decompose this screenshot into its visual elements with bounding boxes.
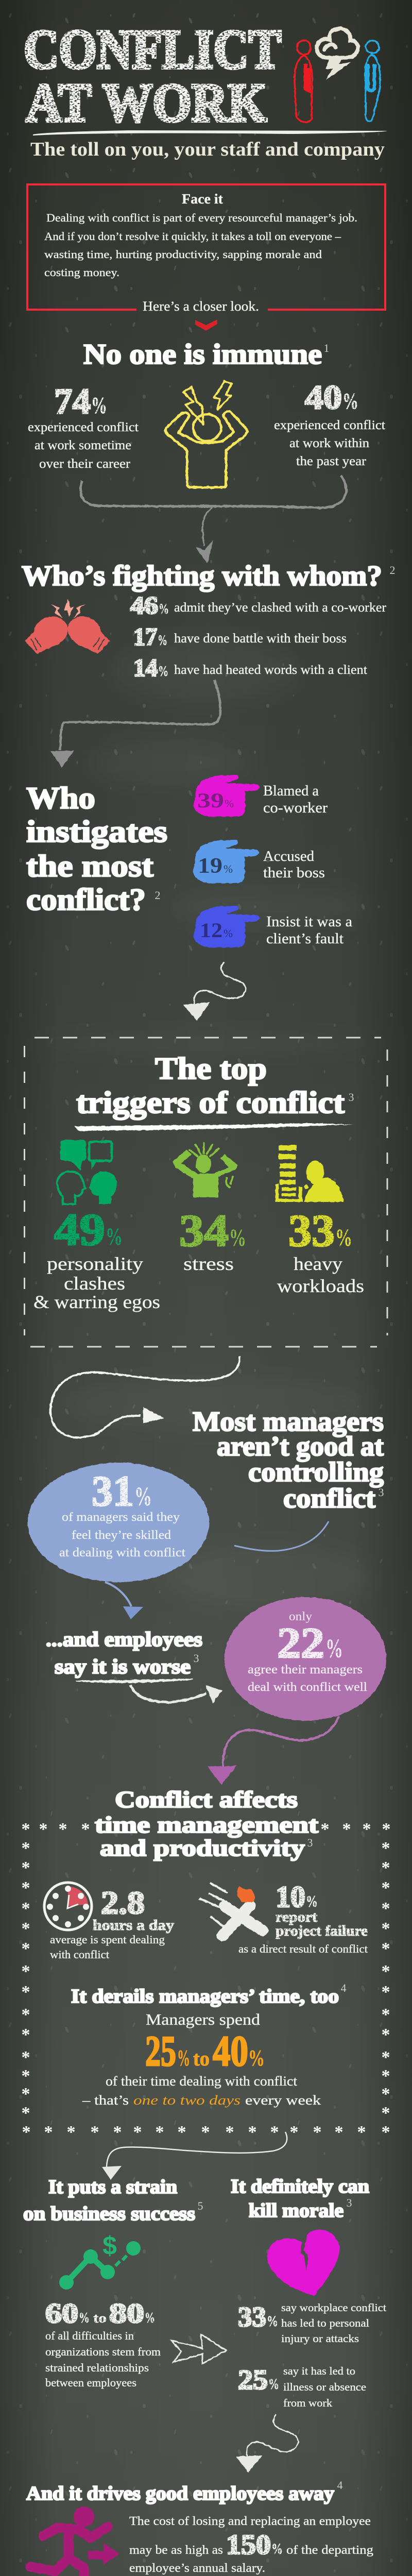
stat: 60 to 80 percent: 80 — [109, 2298, 144, 2329]
text: cost of replacing an employee: % — [271, 2540, 283, 2557]
section: no one is immune — [28, 338, 385, 564]
stat: 33 percent injury: injury or attacks — [281, 2332, 359, 2345]
stat: 25 percent illness: 25 — [238, 2364, 268, 2395]
stat: 2.8 hours a day: hours a day — [93, 1917, 175, 1934]
label: accused their boss: Accused — [263, 848, 314, 865]
heading: and employees say it is worse: say it is worse — [55, 1655, 191, 1678]
icon: magenta pointing hand 39 percent — [194, 775, 260, 817]
heading: aren’t good at — [217, 1431, 384, 1462]
stat: 33 percent injury — [238, 2301, 386, 2345]
stat: 40 percent: % — [342, 388, 358, 414]
stat: 14 percent — [133, 654, 367, 682]
panel: purple ellipse 22 percent: 22 — [277, 1619, 324, 1667]
stat: 33 percent heavy workloads: workloads — [277, 1276, 364, 1296]
stat: 33 percent injury: has led to personal — [281, 2317, 369, 2329]
label: insist it was a client's fault: client’s fault — [266, 930, 344, 947]
stat: 25 percent illness: % — [268, 2376, 279, 2393]
title block — [24, 19, 387, 160]
label: blamed a co-worker — [263, 783, 328, 816]
stat: 60 to 80 percent: % — [79, 2310, 90, 2326]
label: accused their boss: their boss — [263, 865, 325, 881]
icon: red figure — [295, 40, 312, 122]
icon: red chevron — [195, 319, 217, 331]
stat: 25 percent illness — [238, 2364, 366, 2409]
text: time dealing with conflict — [82, 2074, 321, 2108]
stat: 10 percent project failure — [238, 1880, 368, 1955]
stat: 17 percent: % — [158, 633, 167, 649]
heading: Who’s fighting with whom? — [22, 560, 382, 592]
stat: 74 percent: 74 — [54, 382, 91, 421]
icon: storm cloud — [317, 29, 358, 80]
heading — [193, 1406, 384, 1514]
heading — [95, 1786, 319, 1861]
heading — [231, 2176, 369, 2222]
stat: 34 percent stress: 34 — [179, 1206, 229, 1256]
stat: 49 percent personality clashes: % — [106, 1223, 123, 1250]
stat: 46 percent: 46 — [130, 592, 158, 619]
stat: 74 percent: experienced conflict — [28, 420, 139, 434]
stat: 40 percent: the past year — [296, 454, 367, 468]
stat: 17 percent — [133, 623, 347, 651]
stat: 49 percent personality clashes — [33, 1205, 160, 1312]
icon: indigo pointing hand 12 percent: % — [224, 927, 233, 940]
stat: 10 percent project failure: 10 — [276, 1880, 305, 1913]
panel: blue ellipse 31 percent: % — [134, 1482, 152, 1512]
arrow: grey bracket to next section — [81, 476, 346, 564]
stat: 25 percent illness: say it has led to — [283, 2365, 355, 2377]
arrow: white squiggle — [183, 962, 246, 1021]
label: insist it was a client's fault — [266, 913, 352, 947]
heading: 3 — [348, 1091, 354, 1104]
arrow: white to purple ellipse — [76, 1679, 222, 1703]
heading: and productivity — [100, 1835, 305, 1861]
heading: 2 — [154, 889, 161, 902]
text: cost of replacing an employee: 150 — [226, 2529, 271, 2560]
text: time dealing with conflict: – that’s — [82, 2093, 129, 2108]
label: insist it was a client's fault: Insist it was a — [266, 913, 352, 930]
stat: 33 percent heavy workloads — [277, 1206, 364, 1296]
icon: falling chart — [59, 2231, 141, 2290]
panel: blue ellipse 31 percent: 31 — [92, 1467, 134, 1515]
stat: 46 percent: admit they’ve clashed with a co-worker — [174, 601, 387, 615]
stat: 49 percent personality clashes: clashes — [64, 1273, 125, 1294]
stat: 25 to 40 percent: 40 — [213, 2027, 248, 2075]
underline stroke — [33, 130, 387, 135]
title: conflict at work: AT WORK — [26, 73, 267, 133]
icon: running figure — [30, 2506, 119, 2576]
stat: 34 percent stress — [179, 1206, 246, 1274]
text: managers spend: Managers spend — [146, 2010, 261, 2028]
subtitle: The toll on you, your staff and company — [30, 139, 385, 160]
intro paragraph: costing money. — [44, 266, 119, 279]
stat: 25 to 40 percent — [145, 2027, 265, 2075]
heading — [26, 781, 167, 917]
section: who's fighting with whom — [22, 560, 396, 767]
footnote 1: 1 — [323, 342, 330, 354]
section: kill morale — [231, 2176, 386, 2472]
stat: 60 to 80 percent: organizations stem from — [45, 2345, 161, 2358]
icon: blue pointing hand 19 percent: 19 — [198, 854, 222, 878]
title: conflict at work: CONFLICT — [24, 19, 281, 80]
stat: 25 to 40 percent: % — [248, 2045, 265, 2071]
stat: 25 to 40 percent: % — [177, 2045, 190, 2071]
section: who instigates — [26, 775, 352, 1021]
heading: 3 — [346, 2196, 352, 2209]
heading: Conflict affects — [115, 1786, 298, 1812]
subheading: derails managers time: It derails managers’ time, too — [71, 1986, 339, 2007]
heading: time management — [95, 1811, 319, 1838]
stat: 40 percent: 40 — [305, 379, 342, 416]
footnote 2: 2 — [389, 564, 396, 577]
stat: 34 percent stress: % — [229, 1224, 246, 1251]
stat: 49 percent personality clashes: personality — [47, 1253, 143, 1274]
dashed border — [25, 1038, 387, 1347]
arrow: white squiggle — [236, 2414, 298, 2472]
stat: 2.8 hours a day: with conflict — [50, 1948, 109, 1961]
label: blamed a co-worker: Blamed a — [263, 783, 319, 799]
stat: 2.8 hours a day — [50, 1886, 175, 1961]
stat: 14 percent: 14 — [133, 654, 158, 682]
heading: 5 — [198, 2199, 203, 2212]
section: most managers — [28, 1406, 386, 1785]
stat: 40 percent — [274, 379, 385, 468]
icon: indigo pointing hand 12 percent — [194, 906, 260, 947]
section: drives good employees away — [26, 2479, 373, 2576]
label: accused their boss — [263, 848, 325, 881]
heading — [76, 1052, 354, 1120]
stat: 60 to 80 percent: % — [145, 2310, 155, 2326]
icon: blue pointing hand 19 percent — [193, 840, 259, 883]
text: cost of replacing an employee — [129, 2515, 373, 2575]
heading: And it drives good employees away — [26, 2483, 334, 2504]
heading: It puts a strain — [48, 2176, 177, 2198]
panel: purple ellipse 22 percent: deal with conflict well — [248, 1681, 367, 1694]
heading: 4 — [337, 2479, 343, 2492]
text: cost of replacing an employee: may be as high as — [129, 2544, 223, 2557]
stat: 60 to 80 percent: of all difficulties in — [45, 2329, 134, 2342]
icon: stressed person — [173, 1143, 238, 1197]
panel: purple ellipse 22 percent — [225, 1597, 386, 1721]
asterisk border: ******** — [22, 1820, 390, 1839]
stat: 25 percent illness: illness or absence — [283, 2381, 366, 2393]
icon: broken heart — [267, 2230, 339, 2296]
arrow: blue curve into ellipse — [234, 1521, 329, 1551]
intro paragraph: And if you don’t resolve it quickly, it takes a toll on everyone – — [44, 230, 341, 243]
text: time dealing with conflict: one to two days — [133, 2093, 241, 2108]
stat: 10 percent project failure: % — [306, 1892, 318, 1910]
stat: 17 percent: have done battle with their boss — [174, 632, 347, 646]
stat: 10 percent project failure: report — [276, 1909, 317, 1925]
stat: 17 percent: 17 — [133, 623, 157, 651]
heading: and employees say it is worse: ...and employees — [46, 1628, 202, 1651]
heading: the most — [26, 849, 153, 883]
icon: magenta pointing hand 39 percent: 39 — [197, 789, 224, 812]
stat: 60 to 80 percent: 60 — [45, 2298, 78, 2329]
heading: conflict? — [26, 883, 146, 917]
stat: 74 percent: at work sometime — [35, 438, 131, 452]
icon: blue pointing hand 19 percent: % — [224, 862, 233, 875]
stat: 14 percent: % — [158, 664, 168, 680]
stat: 2.8 hours a day: 2.8 — [101, 1886, 145, 1921]
heading underline — [75, 1123, 353, 1131]
icon: indigo pointing hand 12 percent: 12 — [200, 919, 222, 942]
stat: 46 percent: % — [159, 601, 169, 617]
arrow: grey elbow — [50, 680, 220, 767]
icon: crashing plane — [199, 1883, 263, 1936]
text: cost of replacing an employee: of the departing — [286, 2544, 373, 2557]
stat: 74 percent: over their career — [39, 457, 131, 471]
stat: 25 percent illness: from work — [283, 2397, 332, 2409]
arrow: white loop to managers heading — [50, 1356, 239, 1437]
stat: 46 percent — [130, 592, 387, 619]
intro paragraph: wasting time, hurting productivity, sapping morale and — [44, 248, 322, 261]
stat: 10 percent project failure: as a direct result of conflict — [238, 1942, 368, 1955]
stat: 74 percent: % — [91, 392, 107, 418]
heading: face it: Face it — [182, 191, 223, 207]
asterisk border: ************** — [381, 1839, 390, 2123]
stat: 33 percent heavy workloads: heavy — [294, 1253, 342, 1274]
stat: 33 percent injury: % — [267, 2313, 278, 2330]
arrow: white swoop to strain section — [102, 2132, 287, 2180]
heading: on business success — [23, 2203, 195, 2225]
heading: instigates — [26, 815, 167, 849]
stat: 2.8 hours a day: average is spent dealing — [50, 1933, 165, 1946]
heading: triggers of conflict — [76, 1086, 345, 1120]
panel: face it intro — [27, 184, 385, 314]
icon: falling chart: $ — [102, 2231, 117, 2260]
stat: 33 percent injury: 33 — [238, 2301, 266, 2332]
stat: 60 to 80 percent: strained relationships — [45, 2361, 149, 2374]
stat: 60 to 80 percent: between employees — [45, 2376, 136, 2389]
icon: talking heads — [57, 1140, 117, 1204]
stats and labels — [33, 1205, 364, 1312]
stat: 33 percent injury: say workplace conflict — [281, 2301, 386, 2314]
heading: 3 — [307, 1836, 313, 1849]
text: cost of replacing an employee: The cost of losing and replacing an employee — [129, 2515, 371, 2528]
stat: 60 to 80 percent: to — [93, 2311, 107, 2326]
heading: controlling — [248, 1456, 384, 1487]
arrow: white outlined right — [171, 2334, 226, 2364]
text: time dealing with conflict: every week — [245, 2093, 321, 2108]
arrow: purple down — [208, 1716, 339, 1785]
asterisk border — [22, 1820, 390, 2142]
closer look line: Here’s a closer look. — [143, 299, 259, 314]
text: time dealing with conflict: of their time dealing with conflict — [106, 2074, 298, 2089]
panel: time management and productivity — [22, 1786, 390, 2142]
asterisk border: ************** — [22, 1839, 30, 2123]
stat: 49 percent personality clashes: & warring egos — [33, 1292, 160, 1312]
icon: magenta pointing hand 39 percent: % — [225, 797, 234, 810]
panel: top triggers of conflict — [25, 1038, 387, 1347]
stat: 34 percent stress: stress — [183, 1253, 234, 1274]
stat: 25 to 40 percent: to — [193, 2047, 210, 2070]
stat: 60 to 80 percent — [45, 2298, 161, 2389]
label: blamed a co-worker: co-worker — [263, 800, 328, 816]
stat: 40 percent: experienced conflict — [274, 418, 385, 432]
intro paragraph — [44, 211, 357, 279]
panel: blue ellipse 31 percent — [28, 1463, 209, 1582]
stat: 14 percent: have had heated words with a client — [174, 663, 367, 677]
heading: No one is immune — [83, 338, 322, 370]
arrow: blue down — [105, 1582, 143, 1619]
panel: purple ellipse 22 percent: % — [325, 1634, 343, 1664]
heading: kill morale — [249, 2200, 344, 2222]
heading — [23, 2176, 203, 2225]
heading: The top — [155, 1052, 267, 1086]
icon: heavy workload — [276, 1145, 344, 1202]
title: conflict at work — [24, 19, 281, 133]
panel: blue ellipse 31 percent: at dealing with conflict — [59, 1546, 185, 1560]
section: strain on business success — [23, 2176, 203, 2389]
icon: blue figure — [365, 41, 380, 122]
stat: 40 percent: at work within — [289, 436, 370, 450]
heading: Most managers — [193, 1406, 384, 1437]
heading: and employees say it is worse — [46, 1628, 202, 1678]
stat: 33 percent heavy workloads: % — [335, 1224, 352, 1251]
icon: boxing gloves with sparks — [25, 599, 110, 654]
stat: 74 percent — [28, 382, 139, 471]
panel: purple ellipse 22 percent: agree their managers — [248, 1663, 363, 1676]
stat: 10 percent project failure: project failure — [276, 1923, 368, 1939]
panel: blue ellipse 31 percent: of managers said they — [62, 1511, 180, 1524]
icon: stressed figure — [165, 381, 247, 487]
panel: purple ellipse 22 percent: only — [289, 1610, 312, 1623]
heading: and employees say it is worse: 3 — [194, 1652, 199, 1665]
asterisk border: ***************** — [22, 2123, 390, 2142]
stat: 49 percent personality clashes: 49 — [54, 1205, 105, 1255]
heading: 3 — [378, 1486, 384, 1499]
stat: 25 to 40 percent: 25 — [145, 2027, 176, 2075]
text: cost of replacing an employee: employee’s annual salary. — [129, 2562, 265, 2575]
intro paragraph: Dealing with conflict is part of every resourceful manager’s job. — [46, 211, 357, 224]
heading: It definitely can — [231, 2176, 369, 2197]
heading: conflict — [283, 1483, 375, 1514]
heading: Who — [26, 781, 95, 815]
icon: clock — [44, 1883, 92, 1930]
stat: 33 percent heavy workloads: 33 — [288, 1206, 335, 1256]
panel: blue ellipse 31 percent: feel they’re skilled — [72, 1529, 171, 1542]
subheading: derails managers time: 4 — [341, 1981, 346, 1994]
